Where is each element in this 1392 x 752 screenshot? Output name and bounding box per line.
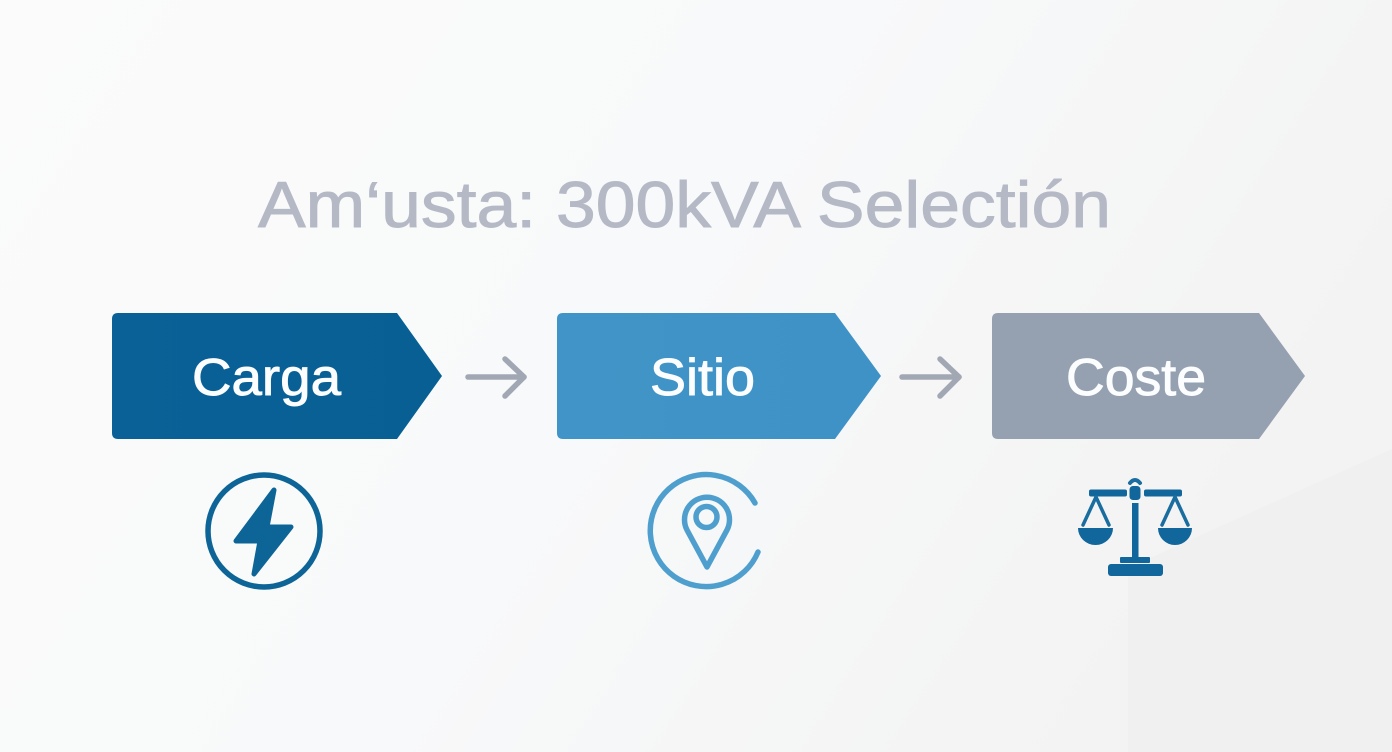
icon: lightning bolt in circle [208,475,320,587]
step: Coste [992,313,1305,439]
label: Carga: Carga [192,349,341,407]
chevron: Coste [992,313,1305,439]
step: Carga [112,313,442,439]
step: Sitio [557,313,881,439]
title: Am‘usta: 300kVA Selectión [258,168,1111,241]
arrow: Carga to Sitio [468,359,524,396]
label: Coste: Coste [1066,349,1206,407]
chevron: Carga [112,313,442,439]
label: Sitio: Sitio [650,349,755,407]
arrow: Sitio to Coste [902,359,959,396]
chevron: Sitio [557,313,881,439]
icon: location pin in open circle [650,475,758,587]
icon: balance scale [1078,480,1192,576]
